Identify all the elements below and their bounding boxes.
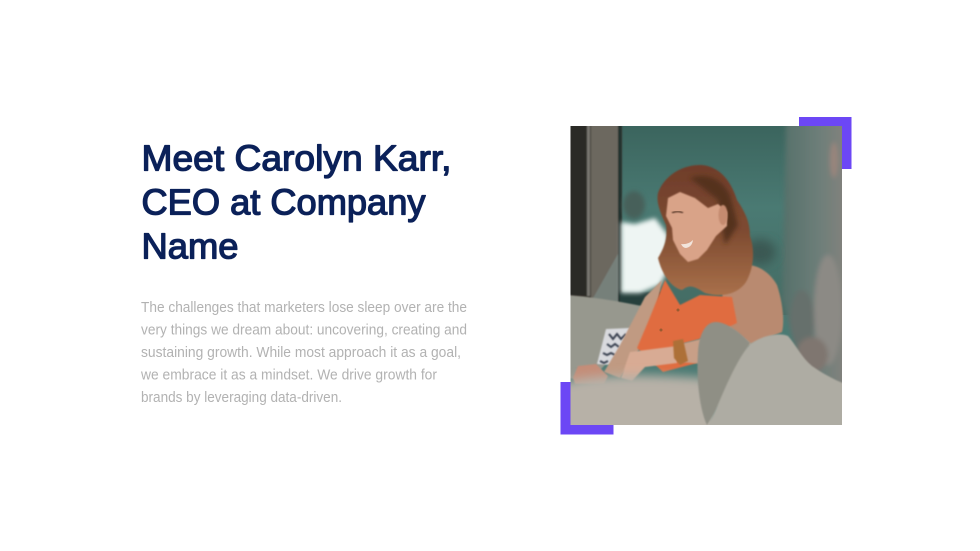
hand on forearm	[621, 346, 677, 381]
body text: brands by leveraging data-driven.	[141, 389, 342, 406]
dark window frame	[570, 126, 660, 306]
large cushion	[712, 334, 842, 425]
hair	[657, 165, 753, 295]
orange top	[637, 280, 737, 372]
title	[142, 138, 452, 266]
bright window reflection	[621, 218, 668, 293]
foreground blurred sofa	[570, 368, 716, 425]
photo: woman on sofa	[570, 126, 842, 425]
left hand	[573, 364, 608, 384]
patterned pillow	[597, 328, 630, 365]
wristwatch	[673, 339, 688, 365]
eye and brow	[672, 212, 683, 213]
title: Name	[142, 226, 238, 266]
title: Meet Carolyn Karr,	[142, 138, 452, 178]
right pillar	[782, 126, 842, 384]
body text: very things we dream about: uncovering, creating and	[141, 322, 467, 338]
teal wall	[620, 120, 790, 315]
body text: sustaining growth. While most approach it as a goal,	[141, 344, 461, 361]
body text: The challenges that marketers lose sleep over are the	[141, 299, 467, 316]
left arm	[604, 280, 662, 378]
right arm	[722, 265, 783, 344]
title: CEO at Company	[142, 182, 426, 222]
small cushion	[697, 322, 750, 425]
back sofa	[570, 294, 641, 380]
wall shadow	[744, 239, 776, 265]
forearm	[683, 338, 752, 364]
body text	[140, 299, 467, 406]
smile	[681, 240, 693, 248]
corner accent: bottom left	[560, 382, 614, 434]
body text: we embrace it as a mindset. We drive growth for	[140, 366, 437, 383]
top buttons	[660, 308, 680, 332]
face	[666, 192, 727, 262]
corner accent: top right	[799, 117, 852, 169]
